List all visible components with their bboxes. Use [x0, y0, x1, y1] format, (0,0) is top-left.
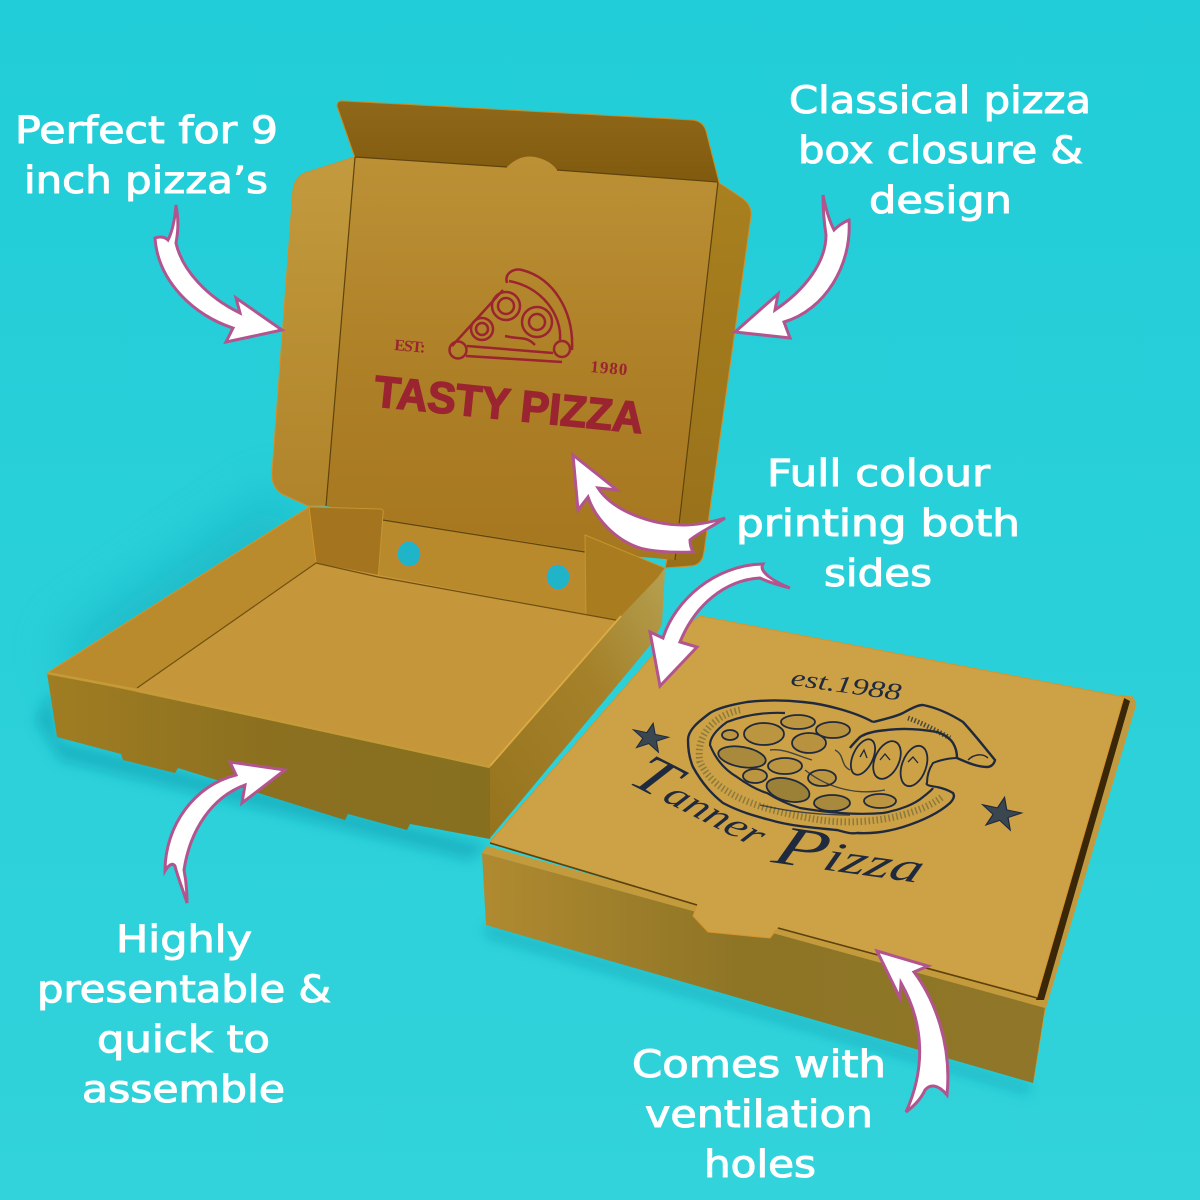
- left wall inner: [47, 507, 316, 700]
- pizza illustration: [688, 700, 995, 833]
- toppings: [717, 715, 896, 811]
- right corner tab: [585, 535, 665, 625]
- label: perfect for 9 inch pizzas: Perfect for 9: [15, 109, 278, 152]
- arrow: to base: [165, 762, 285, 903]
- label: classical closure: [789, 79, 1091, 222]
- label: presentable: [37, 918, 331, 1111]
- label: classical closure: box closure &: [798, 129, 1083, 172]
- lid top: [490, 616, 1124, 997]
- label: full colour printing: printing both: [736, 502, 1020, 545]
- closed pizza box: [482, 616, 1136, 1083]
- label: full colour printing: [736, 452, 1020, 595]
- printed logo: tasty pizza: [372, 270, 646, 443]
- label: perfect for 9 inch pizzas: inch pizza’s: [24, 159, 268, 202]
- front wall with notches: [47, 673, 490, 839]
- thumb hatching: [908, 718, 950, 738]
- sauce swirls: [760, 750, 885, 815]
- label: classical closure: design: [869, 179, 1012, 222]
- arrow: to left flap: [155, 205, 282, 342]
- arrow: to closed box edge: [877, 951, 948, 1112]
- crust hatching: [699, 710, 942, 822]
- ventilation hole right: [546, 564, 570, 590]
- label: presentable: Highly: [116, 918, 252, 961]
- print: tanner pizza logo: [618, 664, 1024, 895]
- star right: [979, 793, 1024, 832]
- label: perfect for 9 inch pizzas: [15, 109, 278, 202]
- lid right flap: [665, 182, 751, 568]
- fingers: [846, 736, 932, 790]
- label: ventilation: [632, 1043, 886, 1186]
- soft shadow behind boxes: [35, 490, 1033, 1094]
- open pizza box lid: [272, 101, 751, 568]
- arrow: to closed box top: [650, 564, 790, 686]
- star left: [630, 720, 671, 754]
- arrow: to lid print: [573, 455, 725, 552]
- pizza outline: [688, 700, 954, 833]
- established text: est.1988: [789, 664, 904, 706]
- slice icon: [450, 270, 572, 362]
- label: ventilation: Comes with: [632, 1043, 886, 1086]
- label: ventilation: ventilation: [645, 1093, 873, 1136]
- lid creases: [326, 157, 718, 560]
- right wall: [490, 570, 665, 838]
- label: presentable: presentable &: [37, 968, 331, 1011]
- front panel: [482, 853, 1045, 1083]
- script brand: [618, 743, 937, 895]
- right side panel: [1033, 695, 1136, 1083]
- inner rim: [710, 713, 933, 814]
- lid front edge shadow: [490, 843, 1037, 998]
- script brand: Pizza: [764, 814, 937, 895]
- label: presentable: quick to: [97, 1018, 270, 1061]
- lid top flap: [337, 101, 719, 182]
- dark slit on the right side: [1036, 697, 1130, 1000]
- open box base: [47, 507, 665, 839]
- ventilation hole left: [397, 541, 421, 567]
- box floor: [137, 563, 621, 780]
- label: full colour printing: Full colour: [767, 452, 991, 495]
- back strip with ventilation holes: [378, 519, 586, 620]
- left corner tab: [309, 507, 383, 580]
- arrow: to right flap: [735, 195, 849, 338]
- label: classical closure: Classical pizza: [789, 79, 1091, 122]
- label: presentable: assemble: [82, 1068, 285, 1111]
- brand name: TASTY PIZZA: [372, 367, 646, 443]
- label: full colour printing: sides: [824, 552, 932, 595]
- script brand: Tanner: [618, 743, 789, 857]
- lid left flap: [272, 157, 355, 506]
- label: ventilation: holes: [704, 1143, 816, 1186]
- est text: EST:: [394, 337, 426, 357]
- hand outline: [850, 705, 995, 767]
- year text: 1980: [590, 357, 628, 379]
- lid main panel: [326, 156, 718, 560]
